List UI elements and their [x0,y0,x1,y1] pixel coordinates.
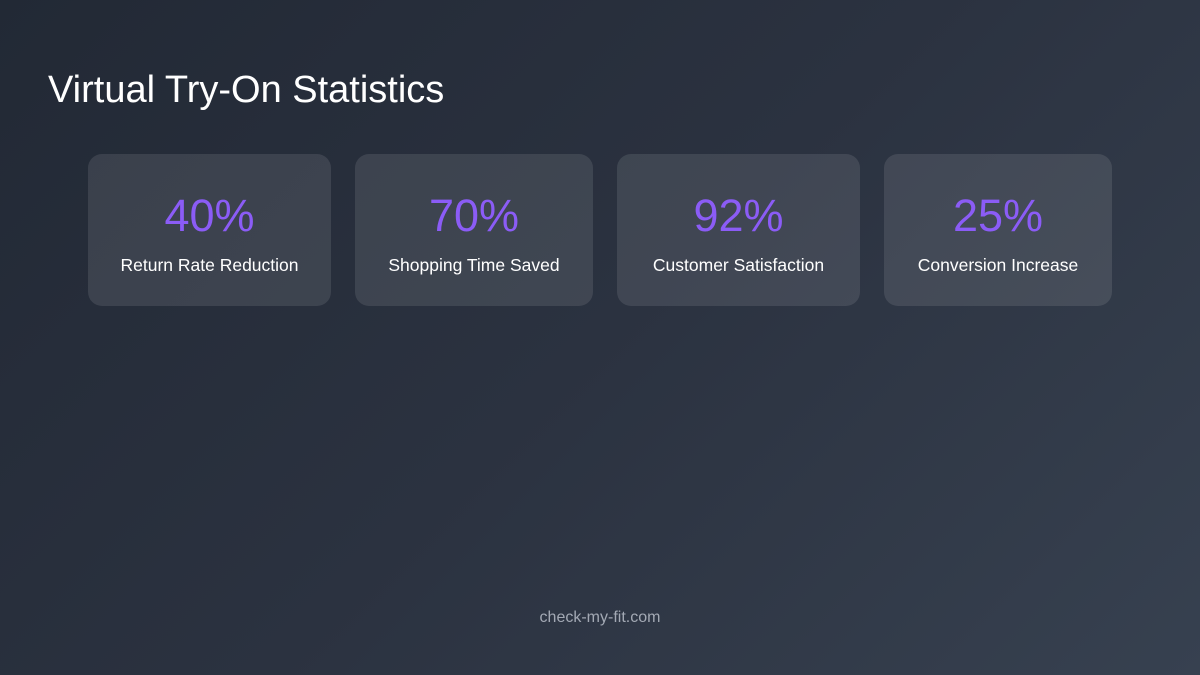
card: satisfaction [617,154,860,306]
stat number: 25% [953,190,1043,241]
stat label: Return Rate Reduction [120,255,299,275]
stat number: 40% [164,190,255,241]
card: return rate [88,154,331,306]
stat number: 92% [693,190,784,241]
card: shopping time [355,154,593,306]
stat number: 70% [429,190,519,241]
footer: check-my-fit.com [540,609,660,626]
title: Virtual Try-On Statistics [48,69,444,111]
stat label: Conversion Increase [918,255,1078,275]
stat label: Customer Satisfaction [653,255,824,275]
stat label: Shopping Time Saved [388,255,560,275]
card: conversion [884,154,1112,306]
